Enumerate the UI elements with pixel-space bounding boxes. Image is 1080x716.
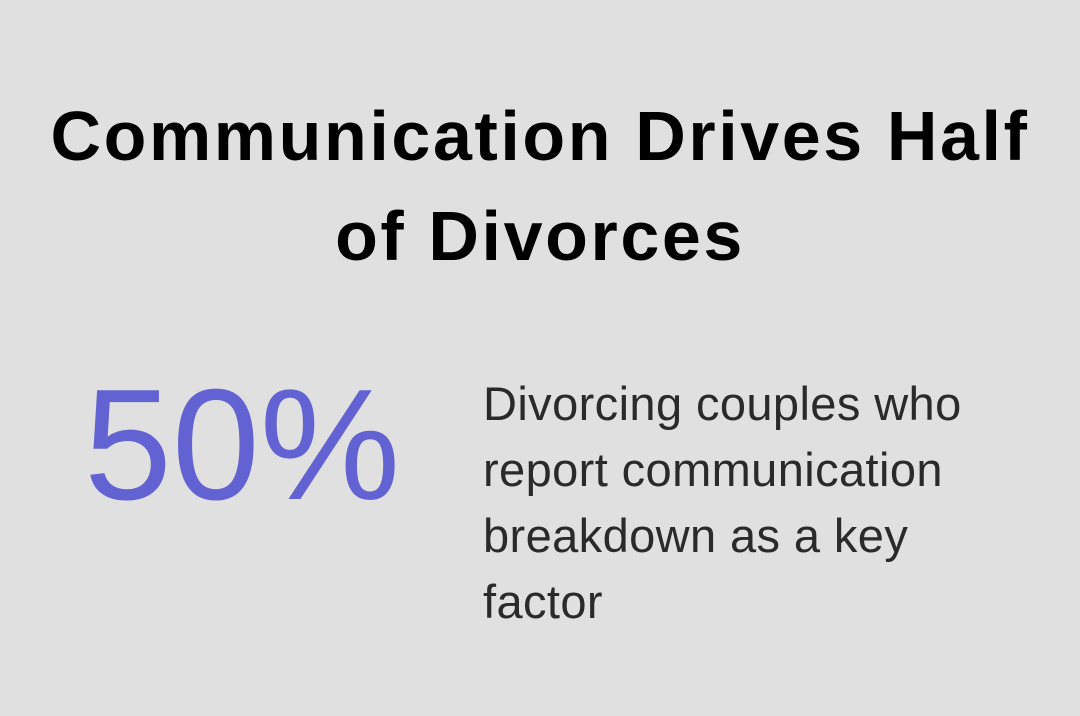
title: of Divorces [335,197,745,275]
title: Communication Drives Half [50,97,1030,175]
statistic description: Divorcing couples who [483,377,962,430]
statistic description: factor [483,575,603,628]
statistic description [483,377,962,628]
statistic description: report communication [483,443,943,496]
title [50,97,1030,275]
big statistic: 50% [84,357,400,533]
statistic description: breakdown as a key [483,509,908,562]
